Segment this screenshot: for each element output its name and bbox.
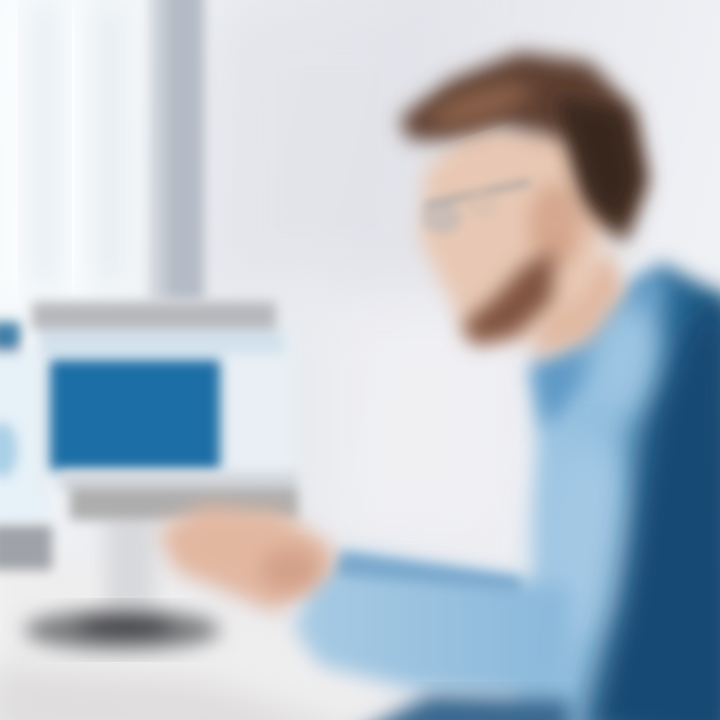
hand shadow bbox=[260, 548, 320, 592]
shirt chest highlight bbox=[537, 440, 633, 640]
shirt collar shade bbox=[530, 275, 668, 430]
desk surface bbox=[0, 545, 440, 720]
cuff shadow bbox=[335, 552, 520, 592]
face bbox=[420, 130, 610, 340]
torso shirt bbox=[510, 262, 720, 720]
neck bbox=[535, 250, 625, 360]
shirt shoulder highlight bbox=[587, 300, 663, 420]
blue screen panel bbox=[50, 360, 220, 470]
glasses bbox=[422, 182, 530, 234]
man bbox=[158, 52, 720, 720]
dark shirt side bbox=[580, 300, 720, 720]
lower sleeve shadow bbox=[350, 695, 570, 720]
monitor lower bezel bbox=[60, 472, 298, 520]
hair highlight bbox=[426, 74, 534, 136]
window column bbox=[150, 0, 204, 300]
secondary monitor at left bbox=[0, 322, 52, 570]
hand bbox=[158, 505, 335, 612]
monitor base bbox=[24, 610, 220, 650]
ear and cheek shade bbox=[529, 183, 581, 267]
hair dark side bbox=[555, 95, 640, 230]
hair bbox=[400, 52, 648, 245]
monitor stand bbox=[105, 515, 155, 615]
forearm sleeve bbox=[295, 552, 570, 700]
beard bbox=[462, 250, 555, 345]
monitor body bbox=[32, 302, 294, 490]
main monitor bbox=[24, 302, 298, 650]
